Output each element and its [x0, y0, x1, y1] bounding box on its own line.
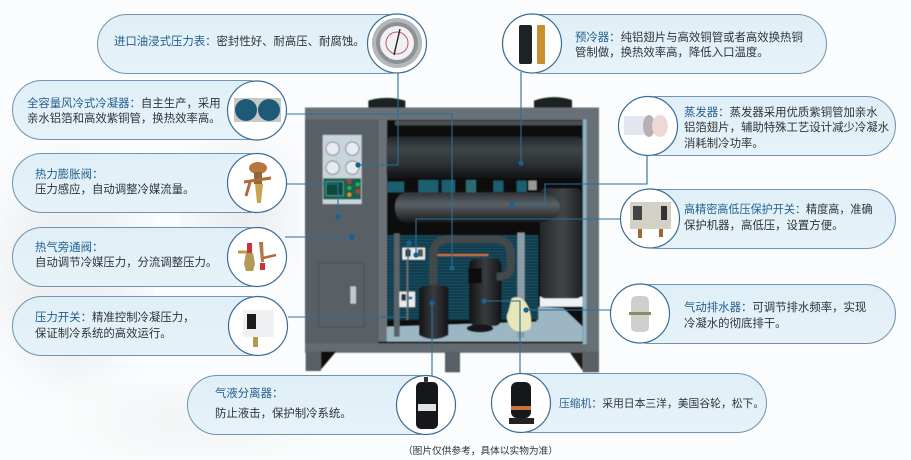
feet	[306, 352, 599, 372]
icon: separator	[416, 377, 438, 429]
icon: compressor	[509, 382, 534, 424]
callout: pressure switch: 保证制冷系统的高效运行。	[35, 326, 172, 340]
callout: precooler: 管制做，换热效率高，降低入口温度。	[575, 45, 769, 59]
automatic drain	[507, 297, 531, 332]
icon: bypass valves	[238, 242, 276, 271]
icon: dual pressure switch	[630, 202, 671, 238]
callout: air-cooled condenser	[12, 80, 286, 140]
callout: automatic drain: 冷凝水的彻底排干。	[684, 316, 787, 330]
callout: automatic drain	[610, 284, 896, 344]
machine: refrigerated dryer cabinet	[305, 97, 599, 372]
callout: evaporator	[618, 96, 896, 156]
callout: high-low pressure switch: 保护机器，高低压，设置方便。	[684, 218, 843, 232]
callout: hot gas bypass valve	[12, 228, 286, 286]
callout: high-low pressure switch	[620, 189, 896, 248]
icon: pressure gauge	[372, 18, 422, 68]
callout: air-cooled condenser: 全容量风冷式冷凝器：自主生产，采用	[27, 96, 221, 110]
callout: hot gas bypass valve: 自动调节冷媒压力，分流调整压力。	[35, 255, 217, 269]
icon: pressure switch	[243, 310, 274, 347]
icon: evaporator	[624, 115, 668, 137]
callout: automatic drain: 气动排水器：可调节排水频率，实现	[684, 300, 866, 314]
callout: pressure switch	[12, 296, 288, 356]
callout: oil-filled pressure gauge	[98, 14, 426, 74]
icon: precooler tubes	[519, 25, 545, 64]
callout: evaporator: 铝箔翅片，辅助特殊工艺设计减少冷凝水	[684, 120, 890, 134]
callout: evaporator: 消耗制冷功率。	[684, 136, 764, 150]
callout: hot gas bypass valve: 热气旁通阀：	[35, 240, 103, 254]
callout: gas-liquid separator: 气液分离器：	[215, 386, 283, 400]
leader lines	[285, 72, 647, 376]
callout: thermal expansion valve	[12, 154, 286, 212]
callout: evaporator: 蒸发器：蒸发器采用优质紫铜管加亲水	[684, 105, 878, 119]
evaporator tank	[395, 188, 582, 298]
icon: drain valve	[629, 296, 651, 332]
suction pipe	[433, 239, 511, 286]
callout: thermal expansion valve: 压力感应，自动调整冷媒流量。	[35, 182, 194, 196]
callout: high-low pressure switch: 高精密高低压保护开关：精度高，准确	[684, 202, 873, 216]
callout: gas-liquid separator: 防止液击，保护制冷系统。	[215, 406, 352, 420]
interior	[378, 120, 583, 343]
callout: compressor: 压缩机：采用日本三洋，美国谷轮，松下。	[559, 396, 764, 410]
callout: gas-liquid separator	[188, 376, 456, 434]
icon: condenser	[234, 98, 281, 122]
top flanges	[368, 97, 572, 108]
caption note: （图片仅供参考，具体以实物为准）	[403, 444, 558, 457]
callout: precooler: 预冷器：纯铝翅片与高效铜管或者高效换热铜	[575, 30, 803, 44]
callout: oil-filled pressure gauge: 进口油浸式压力表：密封性好、耐高压、耐腐蚀。	[114, 34, 365, 48]
condenser fins	[387, 235, 538, 320]
callout: precooler	[502, 14, 826, 74]
cabinet frame	[305, 108, 599, 353]
icon: expansion valve	[244, 162, 271, 203]
callout: pressure switch: 压力开关：精准控制冷凝压力，	[35, 310, 194, 324]
electrical panel	[323, 135, 362, 204]
uprights	[394, 233, 525, 338]
precooler pipe	[387, 137, 583, 178]
blue fins strip	[387, 180, 537, 193]
callout: thermal expansion valve: 热力膨胀阀：	[35, 167, 103, 181]
compressor	[437, 255, 502, 332]
gas-liquid separator body	[419, 285, 448, 339]
callout: compressor	[492, 374, 766, 432]
pressure switches on frame	[399, 248, 425, 320]
access door	[319, 263, 364, 327]
callout: air-cooled condenser: 亲水铝箔和高效紫铜管，换热效率高。	[27, 111, 221, 125]
